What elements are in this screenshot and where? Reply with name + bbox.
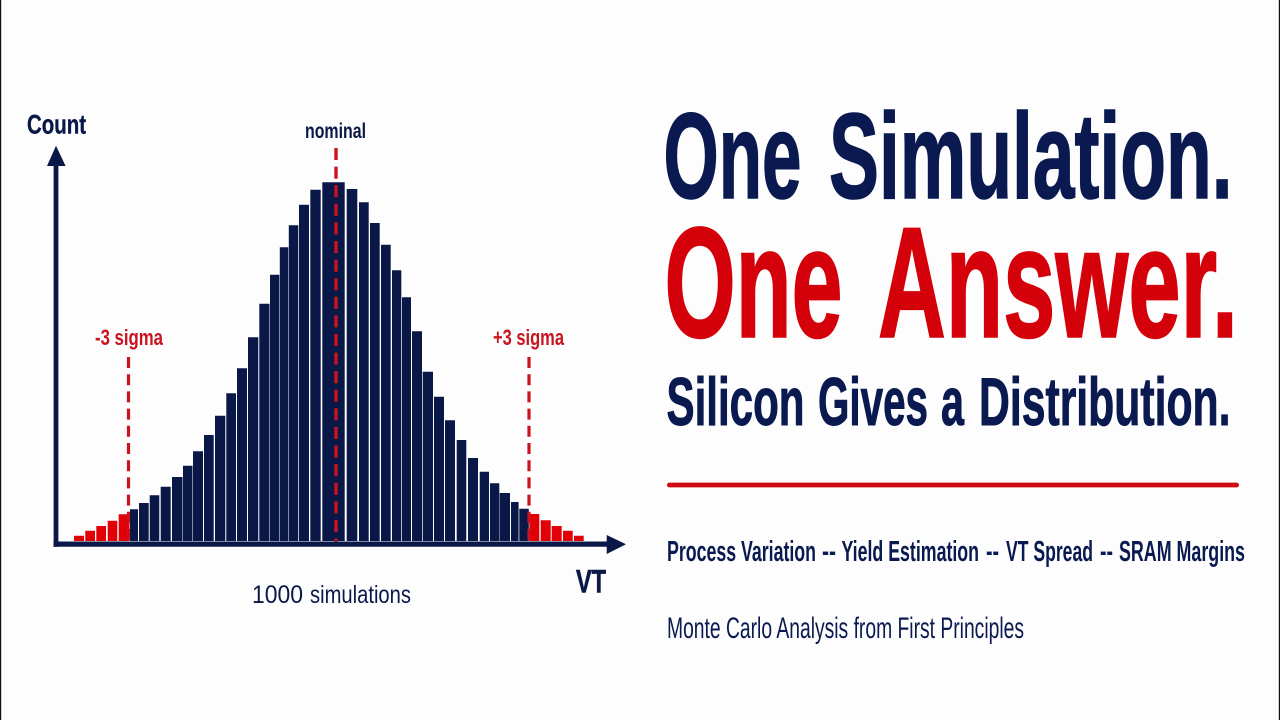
histogram bars: central distribution [130,182,529,541]
heading line 3: Silicon [666,364,804,440]
heading line 3 [666,364,1230,440]
panel: histogram chart [27,110,626,609]
-3 sigma dashed marker [127,357,130,542]
sample count caption: 1000 [252,581,303,609]
panel: headline text [664,88,1245,645]
-3 sigma label: -3 sigma [95,325,164,350]
red divider [667,483,1239,487]
x axis arrow [54,535,626,554]
topics line: -- [1100,536,1113,568]
topics line: Process Variation [667,536,816,568]
heading line 1: One [664,88,802,224]
+3 sigma dashed marker [527,357,531,542]
y axis arrow [47,146,66,547]
nominal dashed marker [334,148,338,542]
histogram bars: right tail beyond +3 sigma [529,514,584,541]
topics line: VT Spread [1006,536,1093,568]
sample count caption [252,581,411,609]
histogram bars: left tail beyond -3 sigma [74,514,130,541]
heading line 1 [664,88,1232,224]
topics line [667,536,1245,568]
topics line: -- [986,536,999,568]
nominal label: nominal [305,120,366,143]
topics line: Yield Estimation [842,536,979,568]
heading line 3: Gives [818,364,928,440]
topics line: -- [822,536,836,568]
y axis label: Count [27,110,86,140]
heading line 3: a [941,364,965,440]
subtitle: Monte Carlo Analysis from First Principles [667,612,1024,645]
x axis label: VT [576,563,606,599]
heading line 2: One [664,196,842,371]
heading line 2 [664,196,1238,371]
+3 sigma label: +3 sigma [493,325,565,350]
sample count caption: simulations [310,581,411,609]
